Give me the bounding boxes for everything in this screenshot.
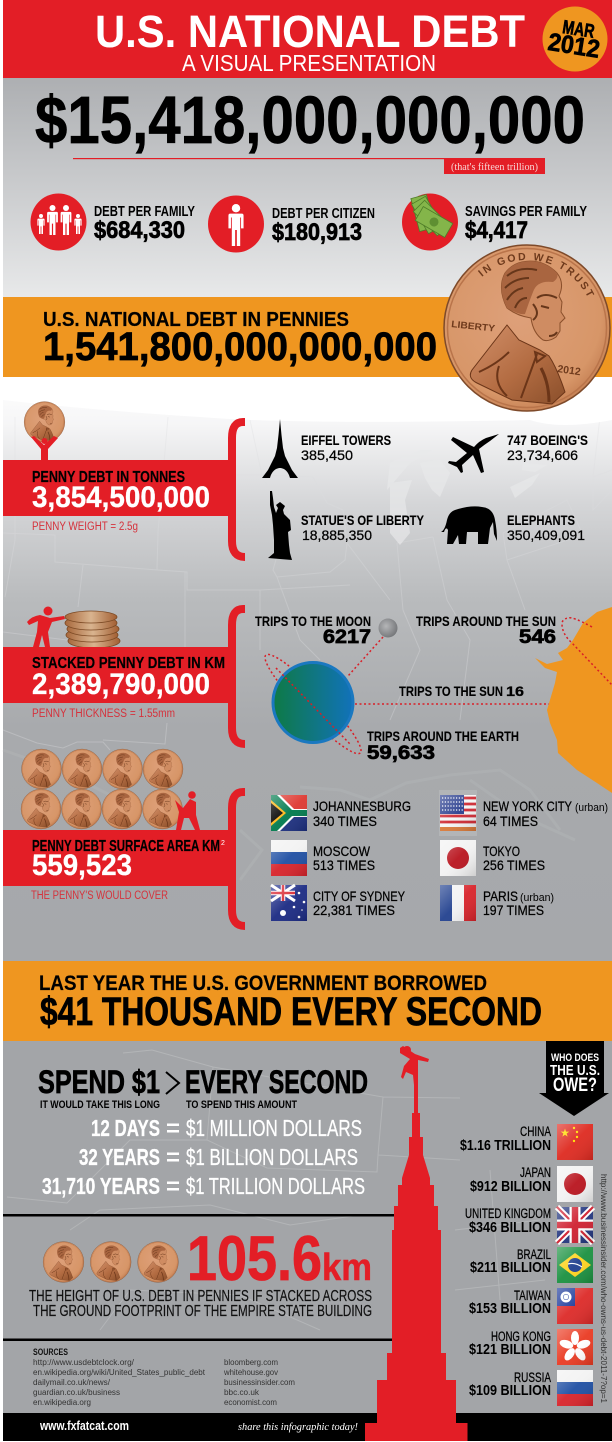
city: moscow [271,840,375,876]
flag: taiwan [557,1288,593,1324]
panel: spend a dollar: EVERY SECOND [185,1064,368,1100]
panel: penny debt in tonnes: PENNY WEIGHT = 2.5g [32,521,138,533]
panel: stacked pennies [3,606,612,793]
header banner [3,0,612,78]
icon: money [402,194,458,250]
map: lower panel outline [7,1050,545,1330]
date badge [542,6,608,72]
city: new york: 64 TIMES [483,813,538,829]
creditor: taiwan [469,1288,593,1324]
icon: figure pushing coin stack [27,606,65,647]
stat: savings per family: $4,417 [465,217,528,244]
city: johannesburg [271,795,411,831]
creditor: russia [469,1370,593,1406]
icon: figure holding penny [24,402,65,460]
row: trillion [42,1173,365,1199]
panel: spend a dollar: SPEND $1 [38,1064,160,1100]
city: moscow: 513 TIMES [313,857,375,873]
banner: borrowed every second: LAST YEAR THE U.S. GOVERNMENT BORROWED [39,972,487,995]
creditor: japan: JAPAN [520,1165,551,1180]
trips to the moon: TRIPS TO THE MOON [255,613,371,629]
icon: sun [535,607,612,793]
sources: guardian.co.uk/business [33,1388,120,1397]
city: new york [439,790,608,836]
footer bar: www.fxfatcat.com [39,1418,129,1433]
sources: bloomberg.com [224,1358,278,1367]
panel: penny debt in tonnes [3,402,588,560]
panel: penny debt in tonnes: 385,450 [301,447,353,463]
panel: penny debt in tonnes: ELEPHANTS [507,512,575,528]
row: million: 12 DAYS [91,1115,160,1141]
creditor: russia: $109 BILLION [469,1382,551,1399]
row: million: $1 MILLION DOLLARS [186,1115,362,1141]
creditor: china: $1.16 TRILLION [460,1137,551,1154]
fifteen trillion note: (that's fifteen trillion) [451,162,538,173]
creditor: china: CHINA [520,1124,551,1139]
icon: large penny: 2012 [557,363,582,378]
arrow [166,1072,179,1094]
trips around the earth [367,728,519,764]
bracket [232,609,245,744]
icon: family [30,194,86,250]
bracket [232,422,245,557]
icon: large penny: IN GOD WE TRUST [478,252,594,296]
row: trillion: 31,710 YEARS [42,1173,160,1199]
red band [3,830,228,886]
subtitle: A VISUAL PRESENTATION [182,50,436,76]
panel: surface area: PENNY DEBT SURFACE AREA KM [32,838,220,855]
arrow: who does: OWE? [553,1075,597,1096]
trips around the sun: TRIPS AROUND THE SUN [416,613,556,629]
panel: penny debt in tonnes: 747 BOEING'S [507,432,588,448]
panel: stacked height: THE HEIGHT OF U.S. DEBT IN PENNIES IF STACKED ACROSS [29,1288,372,1305]
stat: debt per family [30,194,195,250]
panel: stacked pennies: 2,389,790,000 [32,668,210,701]
creditor: japan [470,1165,593,1202]
creditor: united kingdom [465,1206,593,1243]
source url: http://www.businessinsider.com/who-owns-us-debt-2011-7?op=1 [599,1174,608,1404]
banner: debt in pennies: 1,541,800,000,000,000 [43,325,437,369]
icon: earth with orbit [257,647,369,761]
sources: http://www.usdebtclock.org/ [33,1358,135,1367]
city: johannesburg: JOHANNESBURG [313,798,411,814]
empire state building [365,1046,468,1441]
row: billion: 32 YEARS [79,1144,160,1170]
creditor: hong kong: HONG KONG [491,1329,551,1344]
fifteen trillion note [444,158,545,174]
trips to the sun: 16 [506,683,524,699]
map of the United States [3,417,612,750]
title: U.S. NATIONAL DEBT [95,6,525,57]
city: paris: PARIS [483,888,518,904]
icon: stack of pennies [65,611,120,648]
creditor: hong kong [469,1329,593,1365]
big number: km [322,1247,372,1289]
city: johannesburg: 340 TIMES [313,813,377,829]
date badge: 2012 [546,28,602,64]
panel: penny debt in tonnes: 3,854,500,000 [32,481,210,514]
panel: stacked height [29,1224,372,1320]
sources: en.wikipedia.org/wiki/United_States_public_debt [33,1368,206,1377]
trips around the earth: TRIPS AROUND THE EARTH [367,728,519,744]
panel: spend a dollar: IT WOULD TAKE THIS LONG [40,1099,160,1111]
sources: economist.com [224,1398,277,1407]
flag: brazil [557,1247,593,1283]
creditor: brazil: BRAZIL [517,1247,551,1262]
sources: SOURCES [33,1347,68,1357]
icon: elephant [441,506,497,544]
footer bar [3,1413,612,1441]
panel: surface area: 559,523 [32,849,132,882]
flag: france [440,885,476,921]
panel: penny debt in tonnes: 18,885,350 [302,527,372,543]
row: billion: $1 BILLION DOLLARS [186,1144,358,1170]
panel: penny debt in tonnes: PENNY DEBT IN TONNES [32,469,185,486]
flag: south africa [271,795,307,831]
sources [33,1347,295,1407]
creditor: russia: RUSSIA [514,1370,551,1385]
sources: businessinsider.com [224,1378,295,1387]
sources: dailymail.co.uk/news/ [33,1378,111,1387]
red band [3,647,228,703]
panel: stacked pennies: STACKED PENNY DEBT IN KM [32,655,225,672]
panel: penny debt in tonnes: 350,409,091 [507,527,585,543]
stat: debt per citizen: DEBT PER CITIZEN [272,206,375,222]
city: tokyo: TOKYO [483,843,520,859]
banner: debt in pennies [3,297,612,377]
stat: debt per family: DEBT PER FAMILY [94,204,195,220]
trips to the moon: 6217 [323,627,371,648]
trips around the sun [416,613,556,648]
sources: en.wikipedia.org [33,1398,91,1407]
city: sydney: CITY OF SYDNEY [313,888,406,904]
row: billion: = [166,1144,180,1170]
city: moscow: MOSCOW [313,843,371,859]
city: new york: NEW YORK CITY [483,798,573,814]
row: trillion: $1 TRILLION DOLLARS [186,1173,365,1199]
map: great lakes [387,450,547,545]
icon: moon [378,618,398,638]
sources: whitehouse.gov [223,1368,278,1377]
footer bar: share this infographic today! [238,1422,358,1433]
creditor: brazil: $211 BILLION [470,1259,551,1276]
icon: grid of pennies [21,749,183,829]
row: million [91,1115,362,1141]
trips around the earth: 59,633 [367,743,435,764]
city: tokyo: 256 TIMES [483,857,545,873]
panel: stacked pennies: PENNY THICKNESS = 1.55mm [32,708,175,720]
flag: united states [439,790,477,836]
bracket [232,792,245,926]
stat: debt per citizen: $180,913 [272,219,362,246]
arrow: who does: THE U.S. [550,1062,600,1079]
stat: debt per family: $684,330 [94,217,185,244]
banner: debt in pennies: U.S. NATIONAL DEBT IN PENNIES [43,309,349,331]
panel: penny debt in tonnes: EIFFEL TOWERS [301,432,391,448]
icon: person [208,196,264,252]
creditor: taiwan: TAIWAN [514,1288,551,1303]
panel: spend a dollar: TO SPEND THIS AMOUNT [186,1099,297,1111]
row: trillion: = [166,1173,180,1199]
panel: surface area: THE PENNY'S WOULD COVER [31,890,168,902]
city: paris: 197 TIMES [483,902,544,918]
icon: eiffel tower [262,419,298,478]
city: paris [440,885,554,921]
creditor: japan: $912 BILLION [470,1178,551,1195]
map: white top blob [3,377,612,425]
stat: debt per citizen [208,196,375,252]
icon: airplane [448,434,499,473]
red band [3,460,228,516]
stat: savings per family [402,194,587,250]
creditor: taiwan: $153 BILLION [469,1300,551,1317]
panel: stacked height: THE GROUND FOOTPRINT OF THE EMPIRE STATE BUILDING [33,1303,372,1320]
panel: surface area [3,749,608,926]
flag: australia [271,885,307,921]
figure on top [400,1046,429,1085]
date badge: MAR [561,17,596,43]
flag: united kingdom [557,1207,593,1243]
city: tokyo [440,840,545,876]
row: billion [79,1144,358,1170]
city: paris: (urban) [520,892,554,904]
arrow: who does: WHO DOES [551,1052,599,1064]
panel: spend a dollar [38,1064,368,1199]
flag: china [557,1124,593,1160]
panel: who does the U.S. owe [460,1041,609,1406]
trips to the sun: TRIPS TO THE SUN [399,683,503,699]
creditor: united kingdom: UNITED KINGDOM [465,1206,551,1221]
creditor: united kingdom: $346 BILLION [469,1219,551,1236]
icon: large penny [443,244,611,412]
icon: climbing figure [175,791,200,830]
trips to the moon [255,613,371,648]
city: sydney [271,885,406,921]
arrow: who does [539,1041,609,1116]
icon: three pennies [43,1242,178,1282]
flag: hong kong [557,1329,593,1365]
city: sydney: 22,381 TIMES [313,902,395,918]
creditor: brazil [470,1247,593,1283]
icon: statue of liberty [268,491,292,560]
trips around the sun: 546 [519,627,556,648]
icon: large penny: LIBERTY [451,319,496,335]
panel: surface area: 2 [221,840,225,847]
creditor: hong kong: $121 BILLION [469,1341,551,1358]
map: gulf coast [3,750,575,880]
sources: bbc.co.uk [224,1388,260,1397]
panel: penny debt in tonnes: 23,734,606 [507,447,578,463]
banner: borrowed every second [3,961,612,1041]
city: new york: (urban) [575,802,608,814]
creditor: china [460,1124,593,1160]
panel: penny debt in tonnes: STATUE'S OF LIBERTY [301,512,425,528]
big number: 105.6 [187,1224,322,1294]
row: million: = [166,1115,180,1141]
